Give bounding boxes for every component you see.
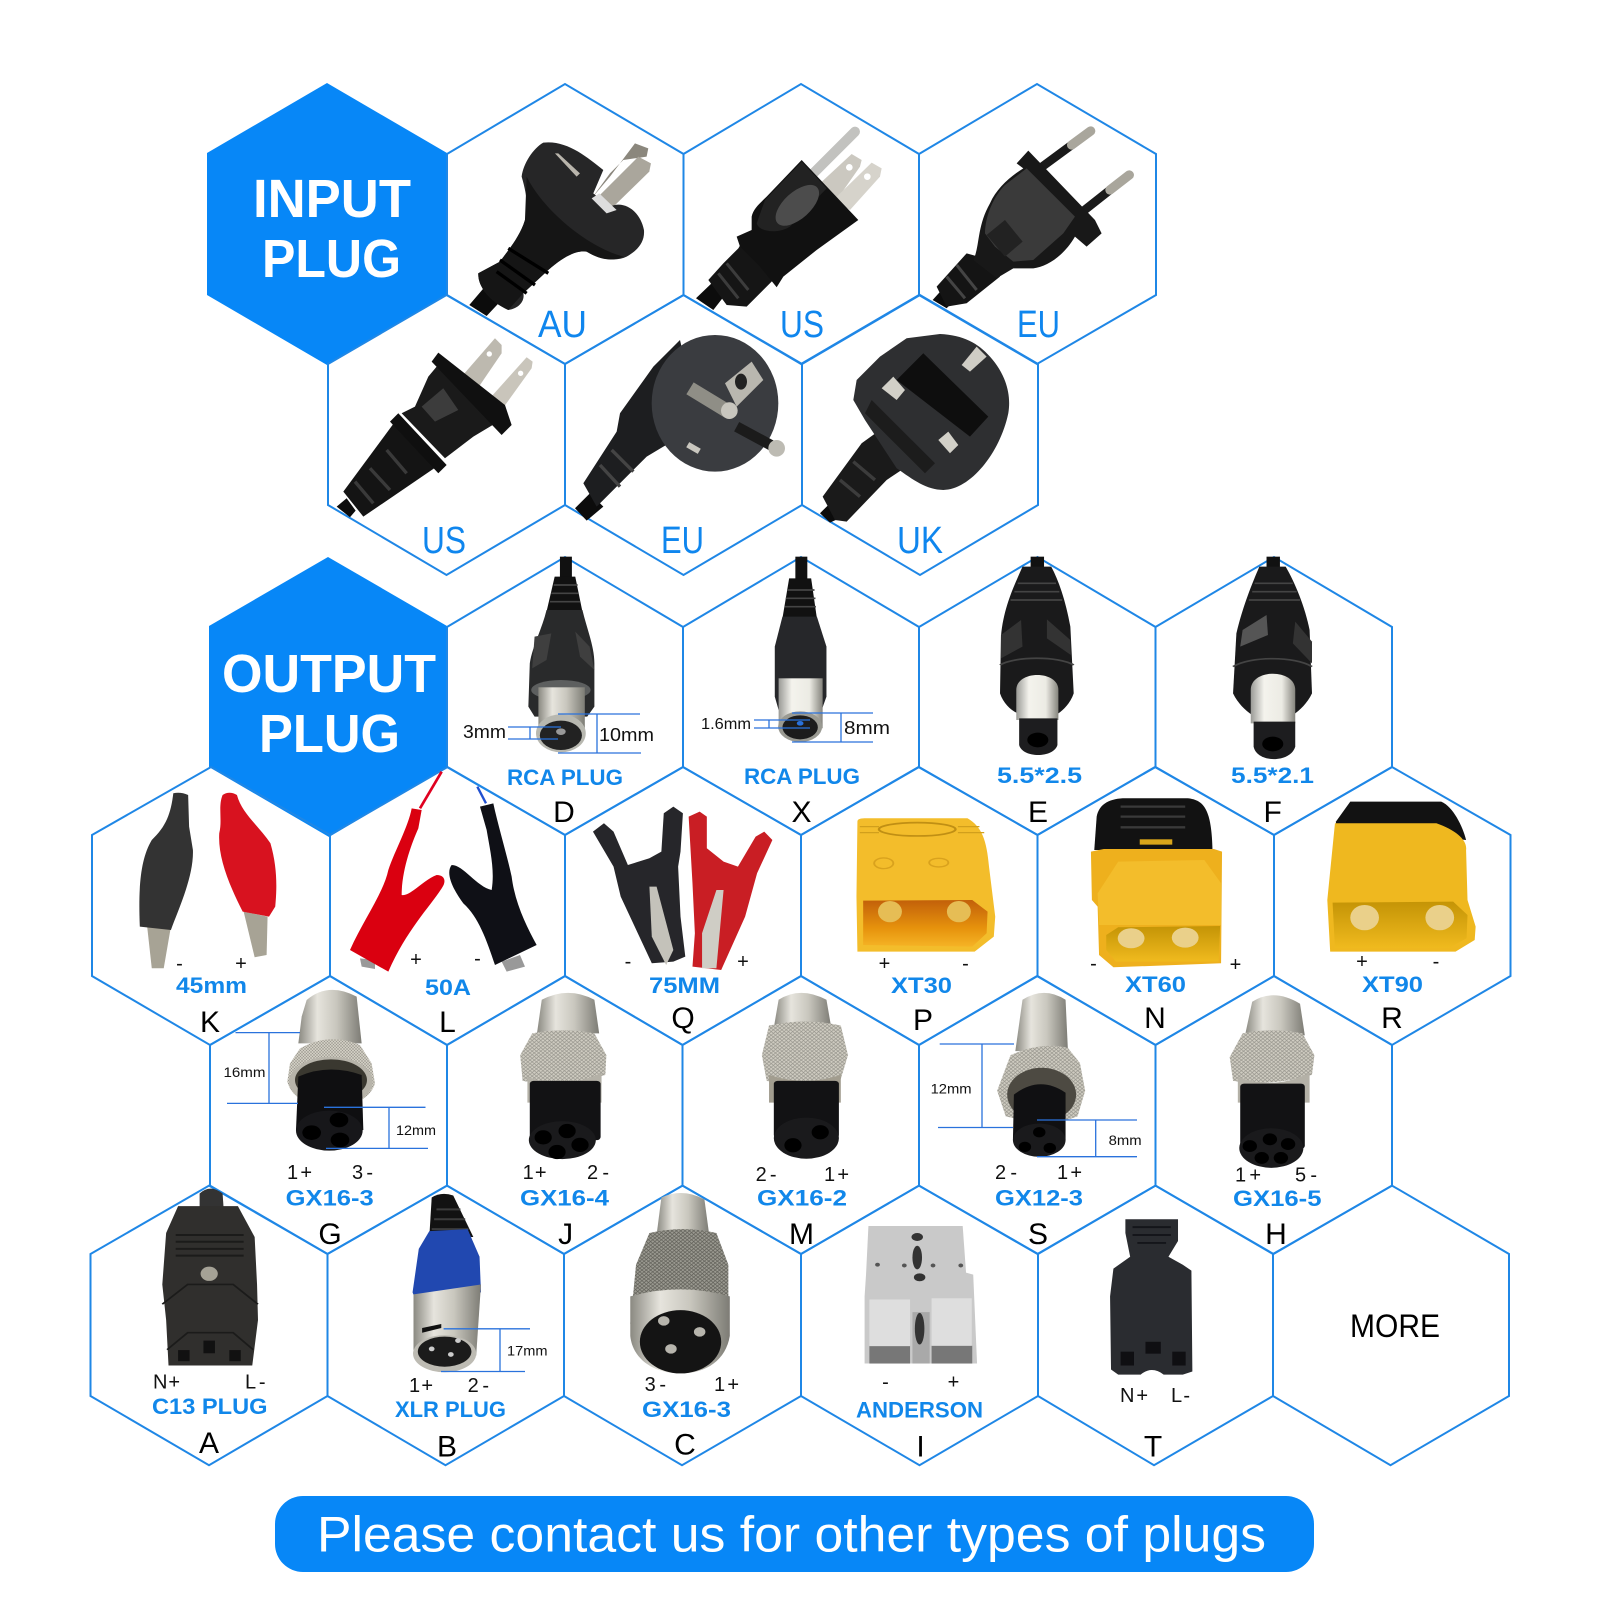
icon: 50A clips (350, 772, 537, 972)
icon: US two-pin plug (337, 338, 533, 517)
polarity marks: + (410, 949, 422, 971)
heading: input plug: INPUT (253, 169, 411, 229)
panel: I Anderson (801, 1186, 1038, 1465)
icon: GX12-3 female connector (997, 993, 1085, 1157)
icon: EU two-pin plug (933, 131, 1129, 308)
polarity marks (882, 1372, 959, 1394)
pin labels: 3- (352, 1162, 373, 1184)
label: GX16-5: GX16-5 (1233, 1186, 1322, 1211)
pin labels: 1+ (1057, 1162, 1082, 1184)
dimension: 8mm: 8mm (1109, 1132, 1142, 1148)
panel: EU two-pin input plug (919, 84, 1156, 364)
pin labels (287, 1162, 373, 1184)
panel: A C13 plug (90, 1186, 328, 1465)
dimension: 8mm: 8mm (844, 718, 890, 738)
icon: XT90 connector (1327, 802, 1476, 952)
dimension: 17mm (441, 1329, 548, 1372)
letter: P: P (913, 1004, 933, 1037)
icon: US three-pin plug (696, 132, 882, 310)
label: XT30: XT30 (891, 973, 952, 998)
polarity marks (410, 948, 481, 971)
dimension: 16mm (224, 1033, 300, 1103)
label: UK: UK (897, 520, 943, 562)
panel: E 5.5*2.5 plug (919, 557, 1156, 835)
letter: X: X (791, 796, 812, 829)
panel: AU input plug (447, 84, 684, 364)
icon: EU Schuko plug (575, 335, 785, 521)
panel: US three-pin input plug (684, 84, 919, 364)
dimension: 8mm (792, 713, 890, 742)
dimension: 3mm: 3mm (463, 722, 506, 742)
polarity marks: + (1356, 951, 1368, 973)
letter: S: S (1028, 1218, 1048, 1251)
pin labels (995, 1162, 1082, 1184)
panel: M GX16-2 (682, 976, 919, 1254)
dimension: 12mm: 12mm (396, 1122, 436, 1138)
polarity marks (176, 953, 247, 975)
polarity marks (1356, 951, 1439, 973)
icon: RCA barrel plug X (775, 557, 826, 742)
pin labels (153, 1372, 266, 1394)
heading: output plug: OUTPUT (222, 644, 436, 704)
polarity marks: + (948, 1372, 959, 1394)
panel: X RCA plug 8mm (683, 557, 919, 835)
icon: GX16-3 female connector (287, 990, 375, 1151)
letter: F: F (1264, 796, 1282, 829)
dimension: 16mm: 16mm (224, 1064, 266, 1080)
dimension: 1.6mm: 1.6mm (701, 716, 751, 733)
polarity marks (625, 951, 749, 973)
icon: XT30 connector (856, 818, 995, 952)
icon: DC plug 5.5x2.1 (1233, 557, 1312, 759)
icon: Anderson connector (865, 1226, 977, 1364)
letter: R: R (1381, 1002, 1403, 1035)
panel: UK input plug (802, 295, 1038, 575)
dimension: 8mm (1037, 1120, 1142, 1157)
pin labels: 1+ (287, 1162, 312, 1184)
dimension: 10mm: 10mm (599, 725, 654, 745)
letter: N: N (1144, 1002, 1166, 1035)
letter: G: G (318, 1218, 342, 1251)
panel: F 5.5*2.1 plug (1156, 557, 1392, 835)
pin labels (409, 1375, 489, 1397)
polarity marks: - (625, 951, 631, 973)
icon: AU plug (469, 142, 651, 316)
letter: E: E (1028, 796, 1048, 829)
letter: I: I (916, 1430, 925, 1464)
heading: output plug: PLUG (259, 704, 400, 764)
polarity marks (879, 953, 969, 975)
pin labels: 1+ (714, 1374, 739, 1396)
pin labels (1235, 1165, 1317, 1187)
pin labels: 2- (756, 1164, 777, 1186)
panel: input plug badge (207, 83, 447, 365)
dimension: 12mm (324, 1107, 436, 1148)
polarity marks: + (879, 953, 890, 975)
icon: 45mm alligator clips (139, 793, 276, 968)
icon: UK plug (820, 334, 1009, 523)
label: 50A: 50A (425, 975, 471, 1000)
panel: EU Schuko input plug (565, 295, 802, 575)
label: XLR PLUG: XLR PLUG (395, 1397, 506, 1422)
label: GX16-3: GX16-3 (286, 1185, 374, 1210)
panel: R XT90 (1274, 767, 1510, 1045)
letter: M: M (789, 1218, 814, 1251)
icon: DC plug 5.5x2.5 (1000, 557, 1074, 755)
polarity marks: - (1090, 953, 1097, 975)
label: GX12-3: GX12-3 (995, 1185, 1083, 1210)
panel: P XT30 (801, 767, 1038, 1045)
heading: output plug (222, 644, 436, 764)
icon: GX16-4 female connector (520, 993, 606, 1159)
panel: output plug badge (209, 557, 447, 837)
pin labels: N+ (1120, 1385, 1148, 1407)
polarity marks (1090, 953, 1241, 976)
icon: 75MM clips (593, 807, 772, 970)
letter: B: B (437, 1430, 457, 1464)
pin labels: 2- (468, 1375, 489, 1397)
pin labels: L- (245, 1372, 266, 1394)
panel: G GX16-3 (210, 976, 447, 1254)
panel: more (1273, 1186, 1509, 1465)
panel: US two-pin input plug (328, 295, 565, 575)
pin labels: N+ (153, 1372, 180, 1394)
pin labels: 1+ (1235, 1165, 1261, 1187)
polarity marks: + (235, 953, 247, 975)
panel: T connector (1038, 1186, 1273, 1465)
pin labels (1120, 1385, 1190, 1407)
dimension: 3mm (463, 722, 561, 742)
label: 75MM: 75MM (649, 973, 720, 998)
label: XT60: XT60 (1125, 972, 1186, 997)
label: 5.5*2.5: 5.5*2.5 (997, 763, 1082, 788)
label: 45mm: 45mm (176, 973, 247, 998)
pin labels (645, 1374, 739, 1396)
letter: Q: Q (671, 1002, 695, 1035)
letter: H: H (1265, 1218, 1287, 1251)
polarity marks: - (882, 1372, 889, 1394)
panel: J GX16-4 (447, 976, 682, 1254)
label: ANDERSON: ANDERSON (856, 1398, 983, 1423)
dimension: 10mm (558, 714, 654, 753)
callout text: Please contact us for other types of plugs (317, 1506, 1266, 1562)
polarity marks: - (1433, 951, 1439, 973)
label: C13 PLUG: C13 PLUG (152, 1394, 268, 1419)
icon: GX16-2 female connector (762, 993, 848, 1159)
heading: input plug: PLUG (262, 229, 401, 289)
label: EU: EU (661, 520, 704, 562)
panel: C GX16-3 male (564, 1186, 801, 1465)
icon: RCA barrel plug D (528, 557, 594, 752)
label: XT90: XT90 (1362, 972, 1423, 997)
icon: GX16-3 male connector (630, 1193, 730, 1373)
polarity marks: + (737, 951, 749, 973)
pin labels (756, 1164, 849, 1186)
pin labels: 1+ (409, 1375, 433, 1397)
icon: C13 connector (162, 1189, 258, 1366)
label: GX16-2: GX16-2 (757, 1185, 847, 1210)
letter: K: K (200, 1006, 220, 1039)
label: 5.5*2.1: 5.5*2.1 (1231, 763, 1314, 788)
icon: T connector (1110, 1219, 1192, 1375)
polarity marks: + (1230, 954, 1241, 976)
pin labels (523, 1162, 609, 1184)
label: AU: AU (538, 304, 587, 346)
panel: L 50A clips (330, 767, 565, 1045)
label: GX16-4: GX16-4 (520, 1185, 610, 1210)
pin labels: 3- (645, 1374, 666, 1396)
panel: D RCA plug 10mm (447, 557, 683, 835)
label: MORE: MORE (1350, 1308, 1440, 1344)
letter: C: C (674, 1428, 696, 1462)
letter: A: A (199, 1427, 219, 1460)
letter: D: D (553, 796, 575, 829)
label: RCA PLUG: RCA PLUG (744, 764, 860, 789)
label: US: US (422, 520, 466, 562)
label: US: US (780, 304, 824, 346)
panel: Q 75MM clips (565, 767, 801, 1045)
icon: GX16-5 female connector (1230, 995, 1314, 1168)
dimension: 12mm (931, 1044, 1014, 1128)
polarity marks: - (962, 953, 969, 975)
dimension: 12mm: 12mm (931, 1080, 972, 1096)
callout: contact banner (275, 1496, 1314, 1572)
panel: K 45mm clips (92, 767, 330, 1045)
pin labels: 1+ (523, 1162, 547, 1184)
letter: L: L (439, 1006, 456, 1039)
pin labels: L- (1171, 1385, 1190, 1407)
panel: B XLR plug (328, 1186, 564, 1465)
panel: N XT60 (1038, 767, 1274, 1045)
heading: input plug (253, 169, 411, 289)
pin labels: 2- (587, 1162, 609, 1184)
icon: XT60 connector (1091, 798, 1222, 967)
pin labels: 1+ (824, 1164, 849, 1186)
dimension: 1.6mm (701, 716, 810, 733)
polarity marks: - (474, 948, 481, 970)
label: GX16-3: GX16-3 (642, 1397, 731, 1422)
dimension: 17mm: 17mm (507, 1343, 548, 1359)
letter: T: T (1144, 1430, 1162, 1464)
panel: S GX12-3 (919, 976, 1156, 1254)
panel: H GX16-5 (1156, 976, 1392, 1254)
polarity marks: - (176, 953, 183, 975)
pin labels: 5- (1295, 1165, 1317, 1187)
label: EU: EU (1017, 304, 1060, 346)
label: RCA PLUG: RCA PLUG (507, 765, 623, 790)
icon: XLR connector (413, 1194, 481, 1372)
pin labels: 2- (995, 1162, 1017, 1184)
letter: J: J (558, 1218, 573, 1251)
